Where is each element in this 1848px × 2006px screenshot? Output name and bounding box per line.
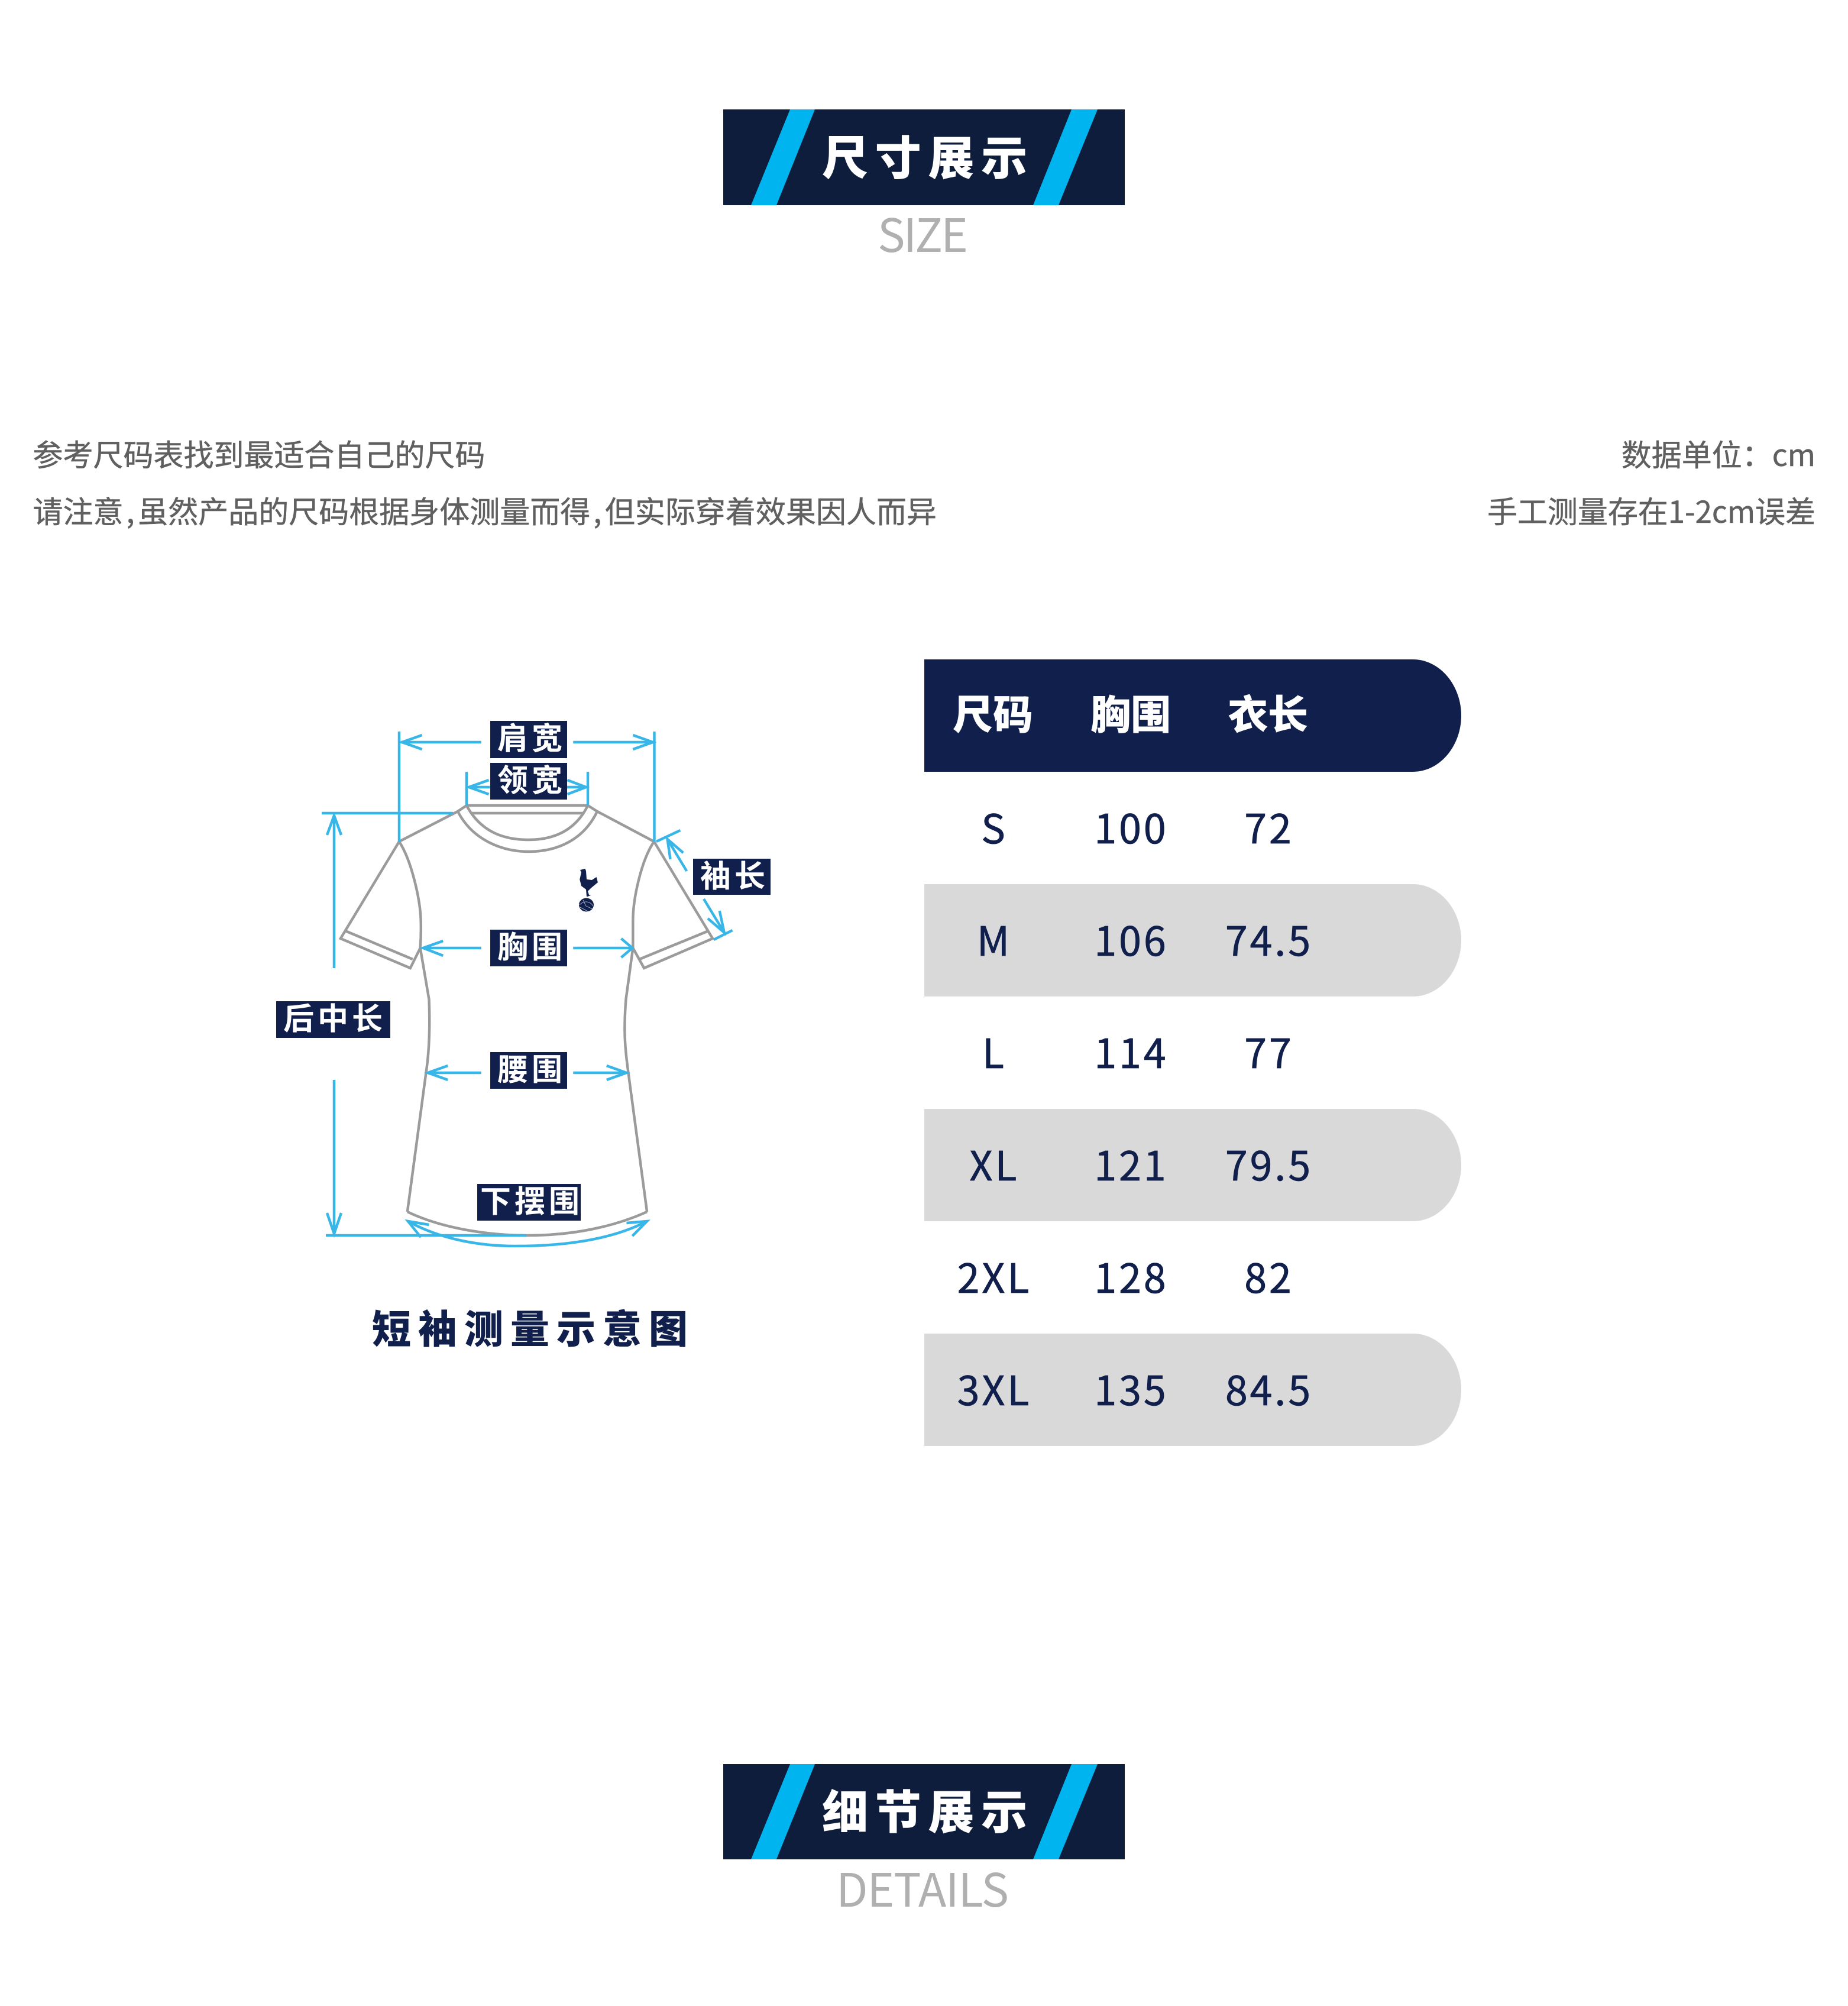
arrow: neck width <box>467 772 588 805</box>
data note right: 数据单位：cm <box>1622 431 1815 475</box>
table values: 72 <box>1244 797 1294 855</box>
label: sleeve length: 袖长 <box>700 852 769 896</box>
table values: 2XL <box>957 1246 1031 1305</box>
table header: 尺码 <box>953 682 1033 741</box>
label: chest: 胸围 <box>497 923 566 967</box>
table values: 77 <box>1244 1021 1294 1080</box>
table values: 128 <box>1094 1246 1169 1305</box>
arrow: hem <box>408 1221 647 1246</box>
table values: 114 <box>1094 1021 1169 1080</box>
table values: XL <box>970 1134 1019 1192</box>
data note right <box>1487 431 1815 532</box>
intro text left: 请注意,虽然产品的尺码根据身体测量而得,但实际穿着效果因人而异 <box>33 488 937 532</box>
table values: L <box>982 1021 1006 1080</box>
table values: 106 <box>1094 909 1169 968</box>
t-shirt outline <box>341 805 713 1235</box>
section banner: details <box>723 1764 1125 1859</box>
data note right: 手工测量存在1-2cm误差 <box>1487 488 1815 532</box>
section banner: size <box>723 109 1125 205</box>
table values <box>957 797 1313 1417</box>
arrow: chest <box>423 939 632 957</box>
table header <box>924 659 1461 772</box>
arrow: shoulder width <box>399 732 654 842</box>
label: back length: 后中长 <box>283 994 386 1038</box>
diagram caption: 短袖测量示意图 <box>372 1298 695 1355</box>
size table <box>924 659 1461 1446</box>
section banner: size: 尺寸展示 <box>822 122 1034 188</box>
table values: 135 <box>1094 1358 1169 1417</box>
table values: 3XL <box>957 1358 1031 1417</box>
icon: club crest <box>579 869 598 912</box>
table values: M <box>977 909 1012 968</box>
table values: 79.5 <box>1225 1134 1313 1192</box>
table header: 胸围 <box>1090 682 1171 741</box>
section banner: details: 细节展示 <box>822 1776 1034 1842</box>
table values: 100 <box>1094 797 1169 855</box>
table values: 74.5 <box>1225 909 1313 968</box>
intro text left <box>33 431 937 532</box>
table values: 84.5 <box>1225 1358 1313 1417</box>
label: waist: 腰围 <box>497 1045 566 1089</box>
label: hem: 下摆围 <box>480 1177 583 1221</box>
arrow: sleeve length <box>656 830 733 940</box>
intro text left: 参考尺码表找到最适合自己的尺码 <box>33 431 486 475</box>
table values: 121 <box>1094 1134 1169 1192</box>
table header: 衣长 <box>1228 682 1308 741</box>
subtitle: SIZE: SIZE <box>878 199 968 266</box>
label: shoulder width: 肩宽 <box>497 714 566 758</box>
arrow: waist <box>428 1066 626 1080</box>
table values: S <box>981 797 1008 855</box>
arrow: back length <box>322 813 526 1235</box>
subtitle: DETAILS: DETAILS <box>836 1854 1009 1920</box>
label: neck width: 领宽 <box>497 756 566 800</box>
table values: 82 <box>1244 1246 1294 1305</box>
row backgrounds <box>924 884 1461 1446</box>
